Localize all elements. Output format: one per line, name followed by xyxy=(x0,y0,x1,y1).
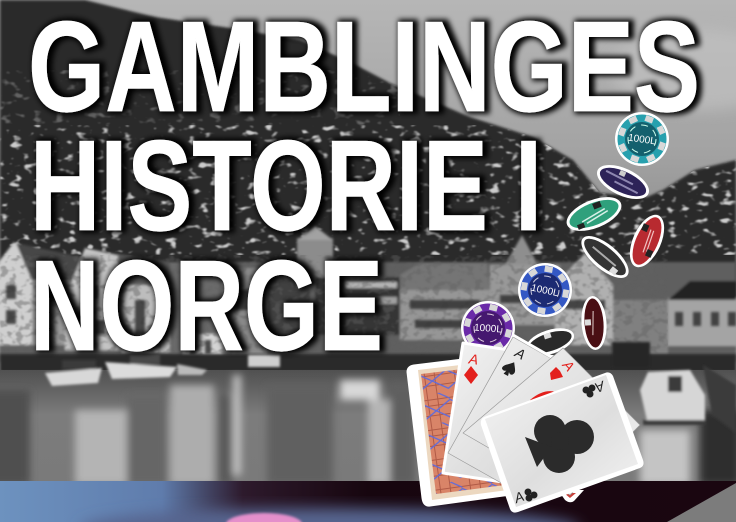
chip: purple xyxy=(455,295,521,361)
windows xyxy=(6,285,736,354)
chip: blue: 1000L xyxy=(530,283,560,299)
pink glow xyxy=(226,513,302,522)
poker chips xyxy=(455,107,674,361)
water reflections xyxy=(0,375,736,485)
chip: maroon edge-on xyxy=(580,295,608,351)
mountain xyxy=(0,0,736,300)
large heart visible behind front card xyxy=(530,391,563,405)
town detail texture xyxy=(0,255,668,355)
chip: dark purple edge-on xyxy=(592,158,654,206)
chip: blue xyxy=(512,257,578,323)
left gabled houses xyxy=(0,242,32,345)
sky highlight xyxy=(610,30,736,110)
water xyxy=(0,370,736,482)
chip: green edge-on xyxy=(562,190,626,238)
corner mark top xyxy=(582,378,608,398)
motor boat right xyxy=(612,342,736,433)
hand of playing cards xyxy=(408,335,644,513)
quay xyxy=(0,354,736,372)
grey stone corner xyxy=(667,483,736,522)
chip: red edge-on xyxy=(623,210,671,272)
corner mark bottom xyxy=(511,488,538,506)
chip: black behind cards xyxy=(523,323,577,361)
card: ace of hearts xyxy=(463,348,640,495)
card fragment under the front card xyxy=(558,490,584,502)
chip: purple: 1000L xyxy=(474,323,503,335)
chip: teal: 1000L xyxy=(627,133,657,147)
corner mark top: A xyxy=(593,378,608,396)
bottom strip: next section of the page xyxy=(0,481,736,522)
chip: teal xyxy=(610,107,674,171)
card: ace of hearts: A xyxy=(559,356,578,374)
title xyxy=(28,0,700,378)
large club xyxy=(525,415,594,473)
blue haze xyxy=(80,508,580,522)
town buildings xyxy=(0,226,736,362)
title: HISTORIE I xyxy=(30,114,542,258)
moored boats xyxy=(45,354,280,386)
hillside houses and trees xyxy=(0,70,736,255)
title: NORGE xyxy=(30,234,383,378)
card: ace of clubs, front xyxy=(481,372,644,513)
card: ace of spades: A xyxy=(512,344,528,363)
card: ace of diamonds: A xyxy=(467,350,479,368)
corner mark bottom: A xyxy=(511,488,526,506)
card back xyxy=(408,353,540,505)
card: ace of diamonds xyxy=(443,343,562,488)
card: ace of spades xyxy=(448,335,602,502)
chip: black edge-on xyxy=(575,229,635,285)
